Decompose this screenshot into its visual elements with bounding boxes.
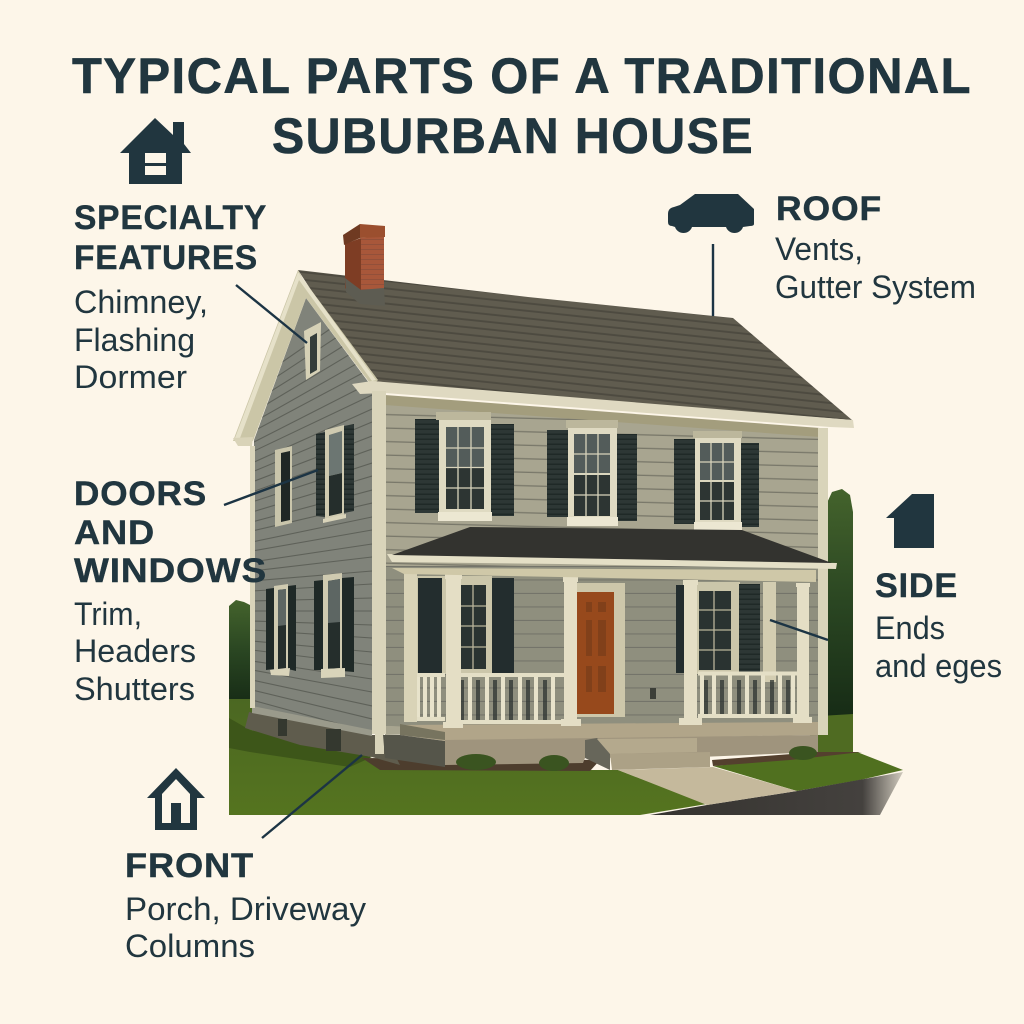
label: front <box>125 847 366 964</box>
porch right window and shutters <box>676 585 684 673</box>
leader lines <box>224 244 828 838</box>
label: roof: ROOF <box>776 190 882 228</box>
chimney <box>343 224 385 306</box>
label: doors and windows: DOORS <box>74 475 207 513</box>
mulch <box>362 758 600 771</box>
porch beam <box>392 568 816 582</box>
icon: side house <box>886 494 934 548</box>
porch <box>383 527 837 767</box>
dormer window <box>304 322 321 380</box>
label: doors and windows: Trim, <box>74 596 142 632</box>
shrubs <box>456 746 817 771</box>
label: front: FRONT <box>125 847 254 885</box>
front wall <box>385 402 820 735</box>
label: front: Columns <box>125 928 255 964</box>
label: roof: Gutter System <box>775 269 976 305</box>
porch left window and shutters <box>416 576 492 674</box>
label: side <box>875 567 1002 684</box>
vent <box>650 688 656 699</box>
eave trim <box>352 381 854 437</box>
walkway <box>618 767 797 805</box>
columns <box>404 572 812 728</box>
driveway <box>650 772 903 815</box>
label: specialty features: Flashing <box>74 322 195 358</box>
icon: car roof <box>668 194 754 233</box>
foundation left <box>245 706 400 765</box>
label: side: Ends <box>875 610 945 646</box>
label: doors and windows: Headers <box>74 633 196 669</box>
house illustration <box>229 224 903 815</box>
porch deck and foundation <box>383 722 818 767</box>
label: roof: Vents, <box>775 231 863 267</box>
label: specialty features: Chimney, <box>74 284 208 320</box>
label: roof <box>775 190 976 305</box>
upper front windows <box>415 412 759 530</box>
corner boards and downspout <box>250 391 828 754</box>
side wall <box>252 298 372 733</box>
label: specialty features: SPECIALTY <box>74 199 267 237</box>
label: doors and windows: AND <box>74 514 155 552</box>
steps <box>585 738 710 770</box>
label: specialty features: FEATURES <box>74 239 258 277</box>
label: front: Porch, Driveway <box>125 891 366 927</box>
trees background <box>229 489 853 716</box>
porch back wall <box>386 566 818 726</box>
porch roof <box>392 527 832 563</box>
label: specialty features <box>74 199 267 395</box>
title: TYPICAL PARTS OF A TRADITIONAL <box>72 48 972 104</box>
label: doors and windows: Shutters <box>74 671 195 707</box>
porch fascia <box>387 554 837 569</box>
title: SUBURBAN HOUSE <box>272 108 754 164</box>
railings <box>413 674 797 722</box>
label: doors and windows: WINDOWS <box>74 552 267 590</box>
lawn <box>229 699 707 815</box>
label: side: SIDE <box>875 567 958 605</box>
icon: front house <box>147 768 205 830</box>
title <box>72 48 972 164</box>
main roof <box>298 270 852 420</box>
icon: house specialty features <box>120 118 191 184</box>
side windows <box>266 424 354 678</box>
label: specialty features: Dormer <box>74 359 187 395</box>
label: doors and windows <box>74 475 267 707</box>
door <box>575 583 625 717</box>
label: side: and eges <box>875 648 1002 684</box>
gable rake trim <box>233 270 378 446</box>
